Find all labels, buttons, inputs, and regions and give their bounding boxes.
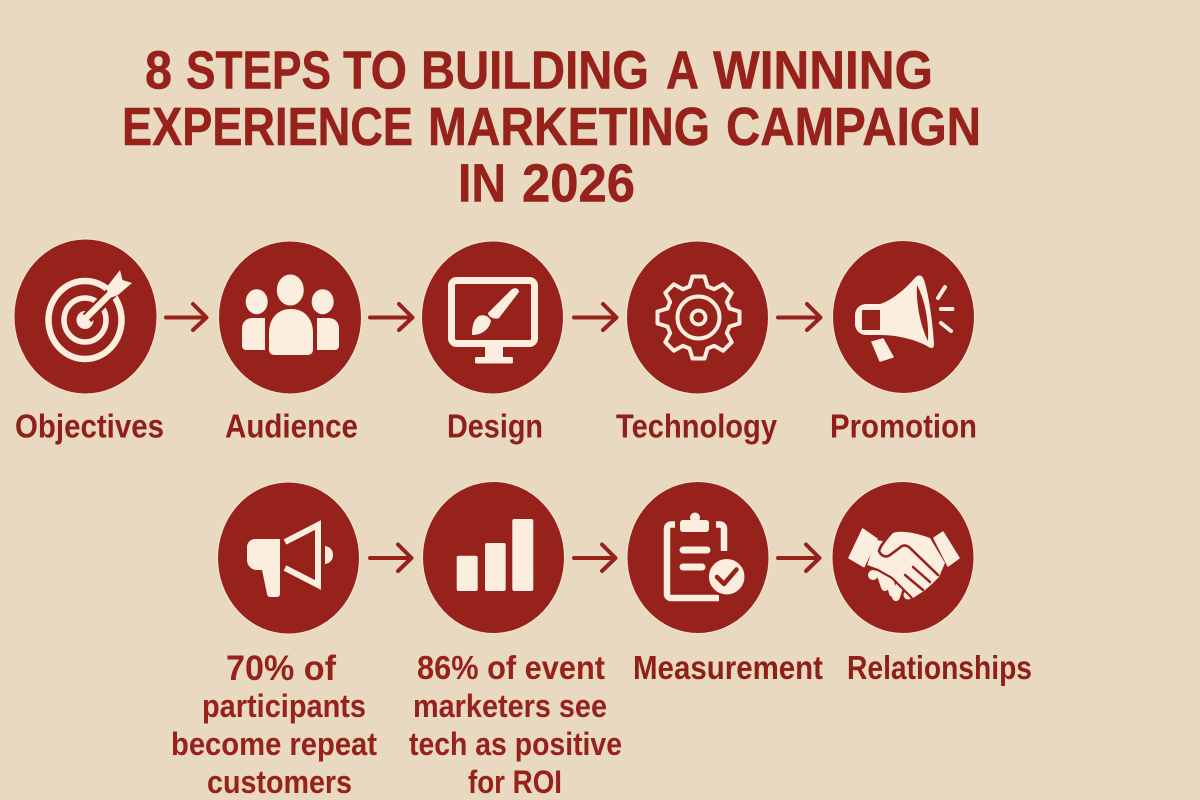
- stat text: 86% of event marketers: for ROI: [468, 764, 562, 800]
- stat 70 percent: [218, 482, 360, 634]
- icon: clipboard with check: [667, 512, 746, 598]
- title: [122, 40, 981, 214]
- arrow: [778, 544, 820, 571]
- stat text: 86% of event marketers: tech as positive: [409, 726, 622, 762]
- title: IN: [458, 154, 506, 214]
- label: Objectives: Objectives: [15, 408, 164, 444]
- title: TO: [343, 40, 407, 100]
- label: Promotion: Promotion: [830, 408, 977, 444]
- icon: outlined megaphone: [247, 525, 333, 597]
- title: EXPERIENCE: [122, 97, 413, 157]
- label: Technology: Technology: [616, 408, 778, 444]
- title: 2026: [522, 154, 635, 214]
- stat text: 70% of participants: 70% of: [226, 649, 336, 688]
- label: Relationships: Relationships: [847, 649, 1032, 686]
- title: 8: [145, 40, 172, 100]
- icon: target with dart: [48, 270, 132, 359]
- stat text: 70% of participants: participants: [202, 688, 366, 724]
- stat text: 70% of participants: become repeat: [171, 726, 377, 762]
- arrow: [370, 304, 412, 330]
- icon: monitor with paintbrush: [452, 280, 534, 364]
- step: Objectives: [14, 239, 157, 394]
- icon: group of people: [242, 274, 339, 355]
- stat text: 86% of event marketers: marketers see: [413, 688, 607, 724]
- stat text: 86% of event marketers: [409, 649, 622, 800]
- stat text: 70% of participants: [171, 649, 377, 800]
- title: MARKETING: [428, 97, 710, 157]
- stat text: 70% of participants: customers: [207, 764, 352, 800]
- title: A: [666, 40, 699, 100]
- icon: bar chart: [457, 519, 533, 591]
- arrow: [574, 304, 616, 330]
- step: Technology: [626, 241, 768, 394]
- icon: gear: [658, 276, 740, 358]
- stat 86 percent: [422, 482, 564, 634]
- icon: megaphone: [855, 275, 952, 361]
- step: Relationships: [832, 482, 974, 634]
- arrow: [370, 544, 412, 571]
- step: Audience: [218, 241, 362, 394]
- title: WINNING: [713, 40, 933, 100]
- step: Design: [422, 241, 564, 394]
- step: Measurement: [627, 482, 769, 634]
- label: Audience: Audience: [225, 408, 358, 444]
- icon: handshake: [849, 529, 959, 600]
- arrow: [166, 304, 206, 330]
- label: Measurement: Measurement: [633, 649, 823, 686]
- stat text: 86% of event marketers: 86% of event: [417, 649, 605, 686]
- arrow: [778, 304, 820, 330]
- arrow: [574, 544, 616, 571]
- title: CAMPAIGN: [726, 97, 981, 157]
- title: STEPS: [186, 40, 331, 100]
- step: Promotion: [832, 240, 974, 394]
- title: BUILDING: [421, 40, 649, 100]
- label: Design: Design: [447, 408, 543, 444]
